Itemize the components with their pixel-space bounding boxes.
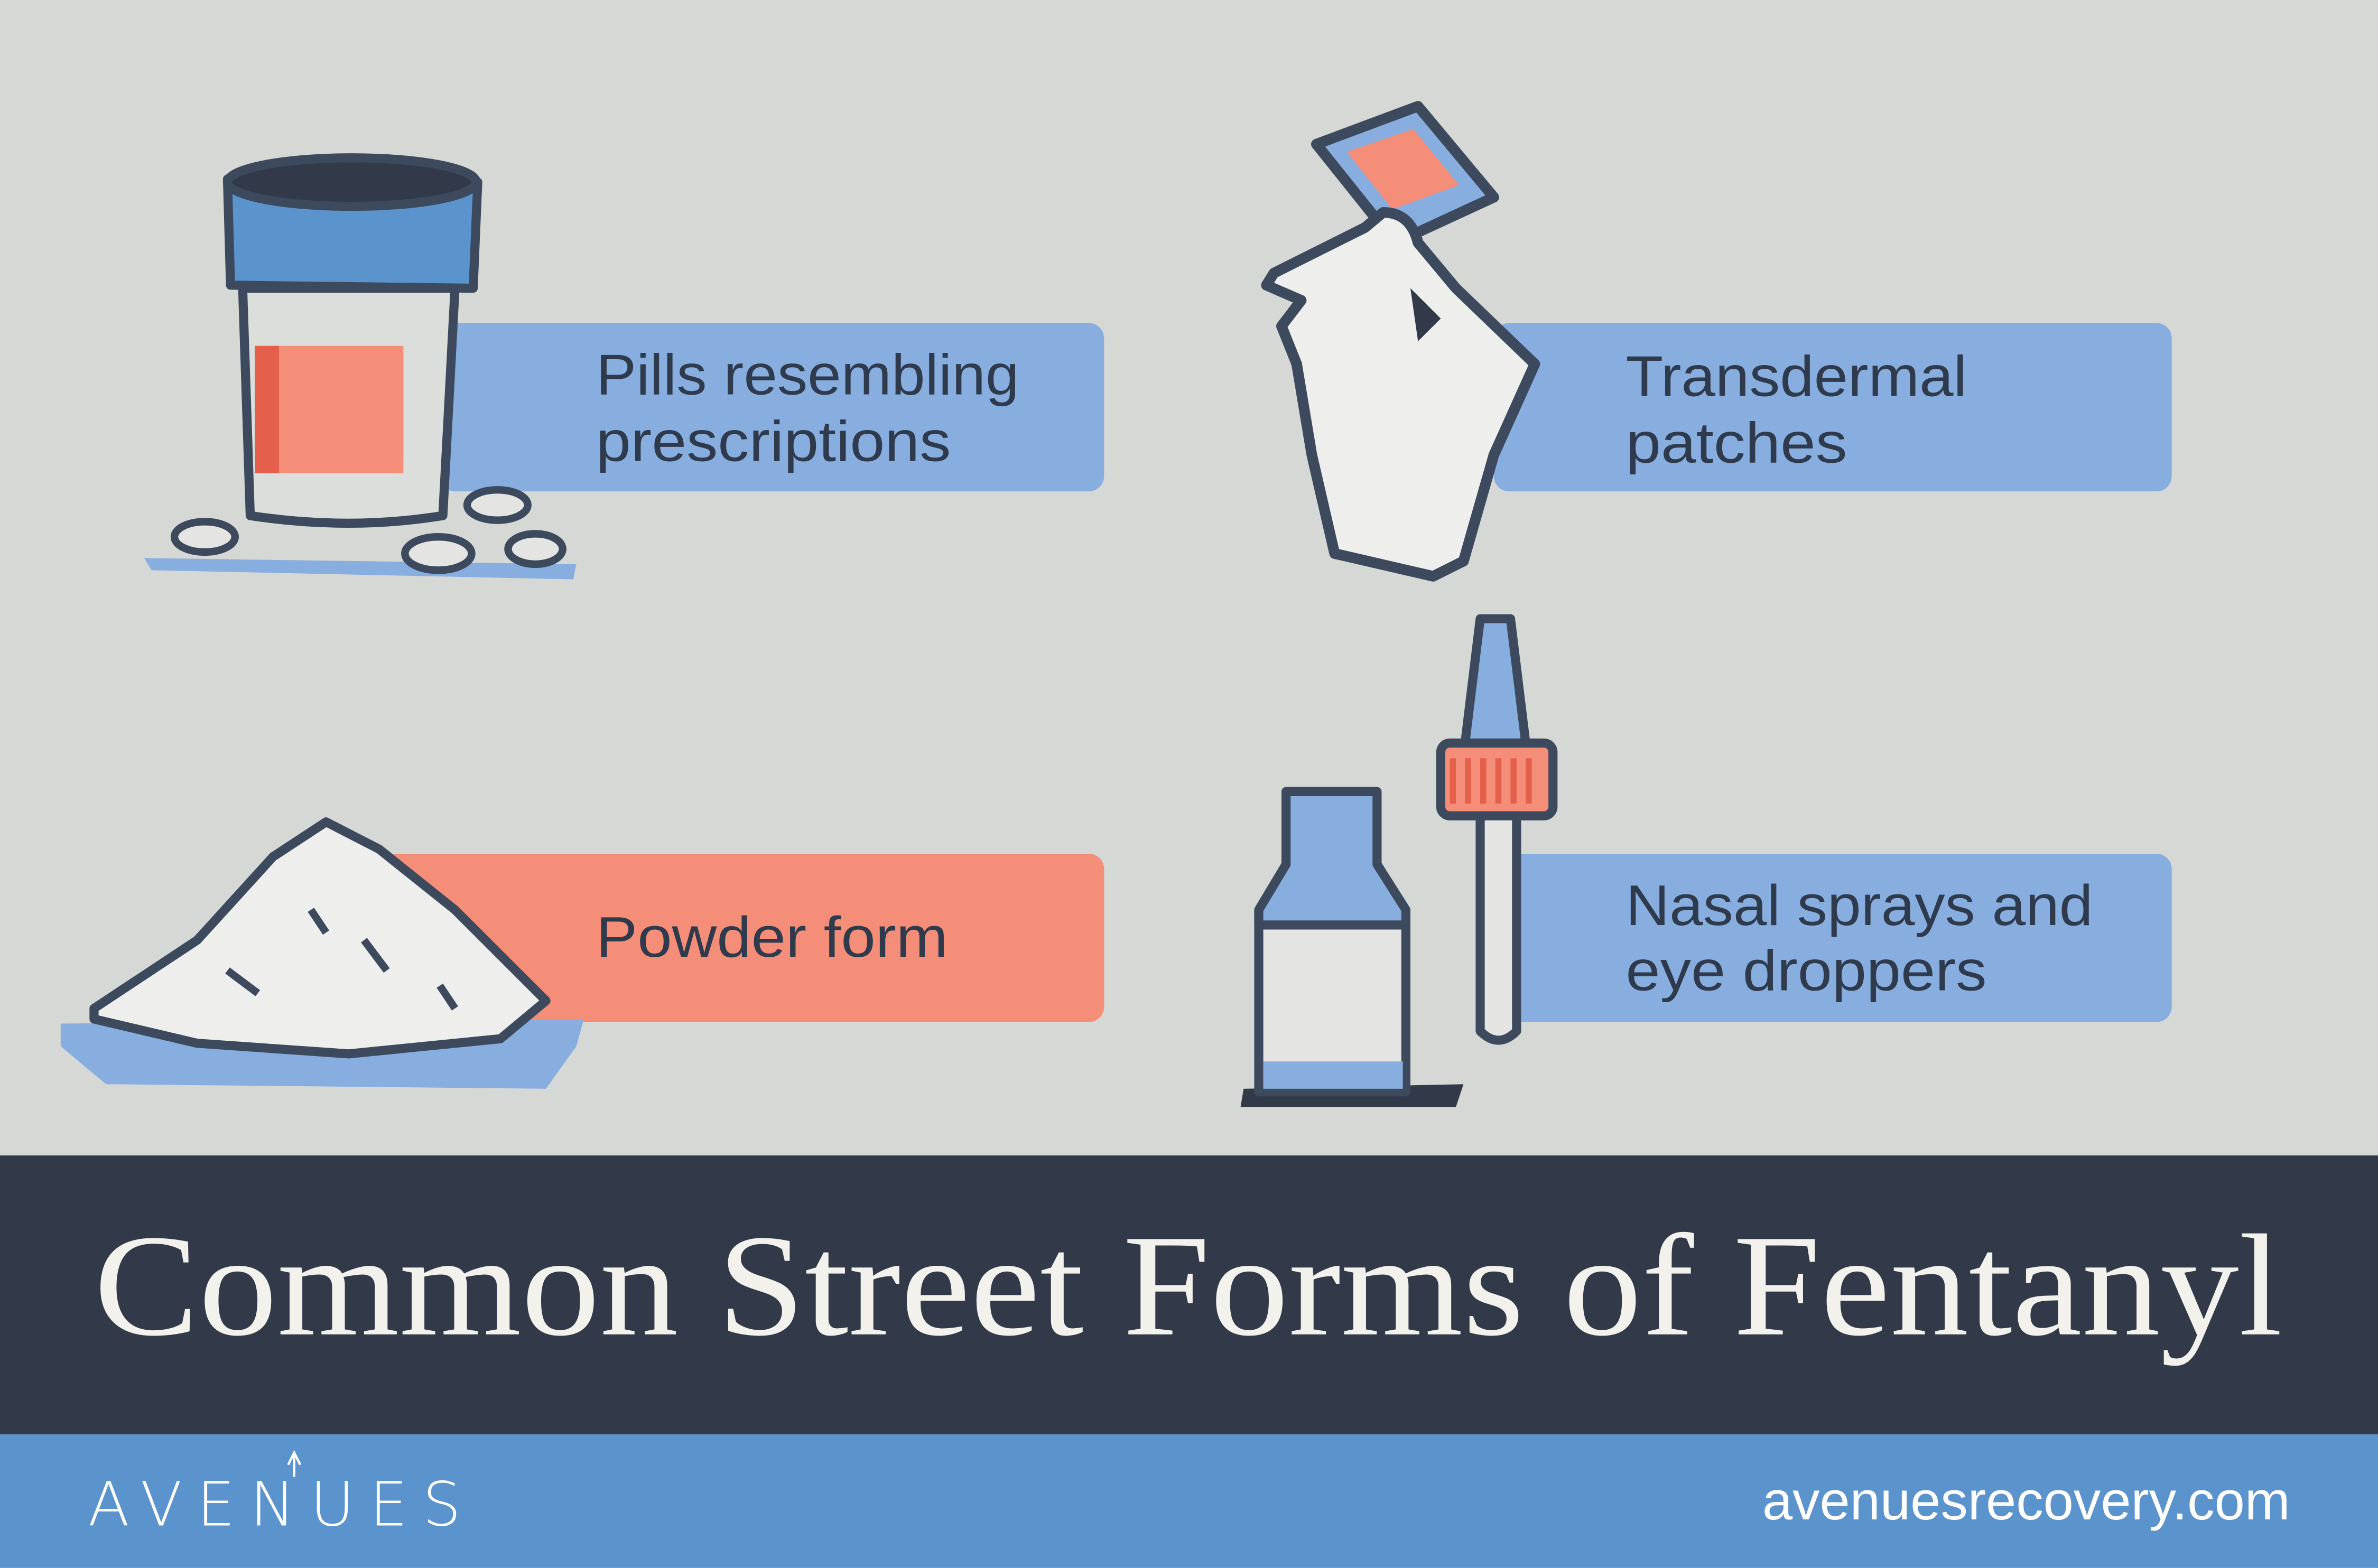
icon: powder pile: [61, 822, 584, 1089]
panel: nasal label: [1506, 854, 2172, 1022]
panel: nasal label: eye droppers: [1626, 938, 1987, 1003]
title band: [0, 1155, 2378, 1434]
website: avenuesrecovery.com: [1762, 1470, 2290, 1531]
icon: nasal spray bottle: [1241, 791, 1463, 1107]
footer: [0, 1434, 2378, 1568]
icon: pill bottle: [144, 158, 577, 580]
panel: pills label: Pills resembling: [596, 342, 1019, 407]
logo: AVENUES: AVENUES: [88, 1469, 470, 1540]
panel: transdermal label: patches: [1626, 411, 1847, 475]
icon: eye dropper: [1441, 619, 1553, 1040]
title: Common Street Forms of Fentanyl: [94, 1205, 2282, 1366]
panel: powder label: [379, 854, 1104, 1022]
panel: pills label: prescriptions: [596, 409, 951, 474]
panel: pills label: [440, 323, 1104, 491]
panel: powder label: Powder form: [596, 905, 948, 969]
panel: transdermal label: Transdermal: [1626, 344, 1967, 408]
icon: hand holding patch: [1266, 106, 1535, 576]
panel: nasal label: Nasal sprays and: [1626, 873, 2093, 938]
panel: transdermal label: [1494, 323, 2172, 491]
